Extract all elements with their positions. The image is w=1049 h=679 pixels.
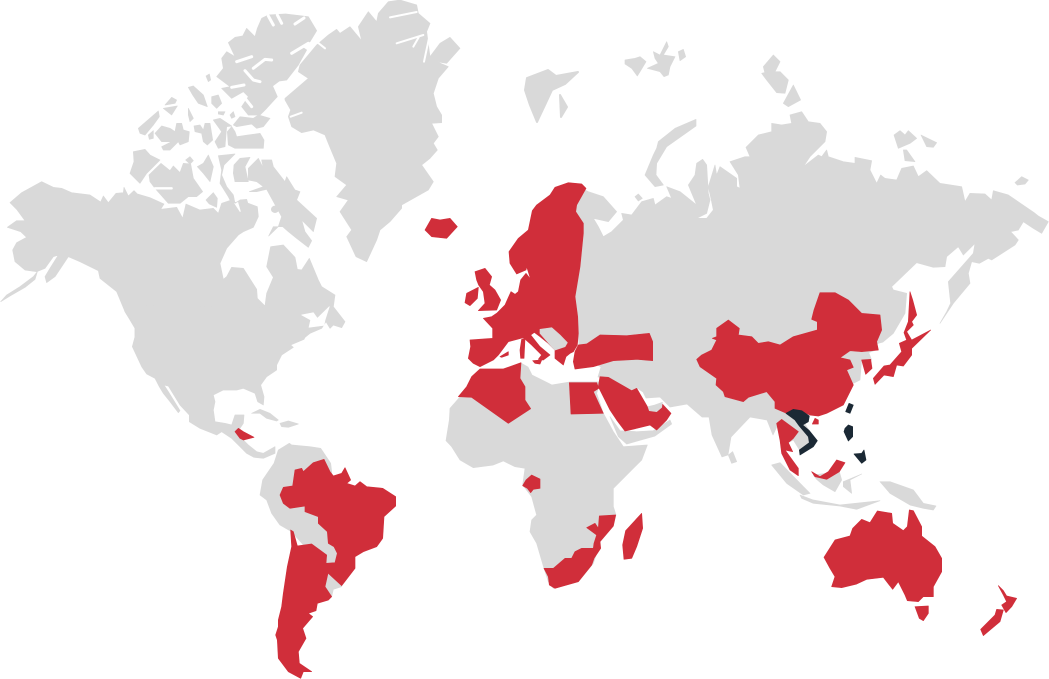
landmass: Greenland — [285, 0, 460, 262]
Arabia — [598, 377, 671, 431]
Gabon — [523, 475, 540, 493]
landmass: Africa — [446, 363, 647, 588]
island: Hispaniola — [280, 421, 298, 427]
region: Central America — [235, 428, 254, 440]
island: Novaya fragment — [560, 95, 567, 117]
region: Africa — [523, 475, 643, 588]
Brazil — [280, 459, 396, 586]
Southern Africa — [544, 515, 616, 588]
island: Cuba — [252, 409, 278, 421]
Vietnam — [786, 409, 817, 455]
landmass: Arabian south coast — [610, 417, 672, 444]
landmass: South America — [260, 443, 342, 597]
Japan — [873, 292, 931, 384]
landmass: Asia — [575, 42, 1048, 457]
region: South America — [276, 459, 396, 678]
region: Europe, Turkey, North Africa and Arabia — [458, 183, 671, 431]
Chile and Argentina — [276, 530, 332, 678]
Malaysian Borneo — [812, 460, 845, 479]
South Korea — [862, 359, 872, 374]
Tasmania — [915, 606, 928, 621]
grey inset — [540, 328, 567, 350]
Australia — [824, 510, 942, 602]
island: Svalbard — [525, 70, 578, 122]
Algeria — [458, 363, 531, 423]
Turkey — [573, 333, 653, 369]
landmass: Southeast Asia — [728, 352, 872, 495]
island: Sri Lanka — [728, 452, 737, 463]
Madagascar — [623, 513, 643, 559]
Mediterranean islands — [520, 338, 525, 358]
grey gulf — [648, 402, 662, 412]
China — [697, 293, 882, 416]
Great Britain — [475, 268, 501, 311]
landmass: Indonesia and New Guinea — [800, 472, 936, 510]
Hainan — [812, 418, 818, 424]
islands: Arctic Russia — [625, 57, 646, 76]
region: East and Southeast Asia — [697, 292, 931, 479]
island: Sumatra — [772, 463, 810, 495]
New Zealand North Island — [998, 586, 1017, 613]
region: Oceania — [824, 510, 1017, 636]
Thailand and Malaysia — [777, 419, 798, 476]
landmass: Arctic Archipelago — [130, 14, 317, 249]
Europe mainland — [468, 183, 586, 367]
Ireland — [465, 287, 478, 306]
region: Iceland — [425, 218, 457, 238]
Philippines — [844, 403, 866, 463]
landmass: North America — [1, 182, 345, 458]
Egypt — [569, 383, 603, 414]
New Zealand South Island — [981, 609, 1003, 636]
